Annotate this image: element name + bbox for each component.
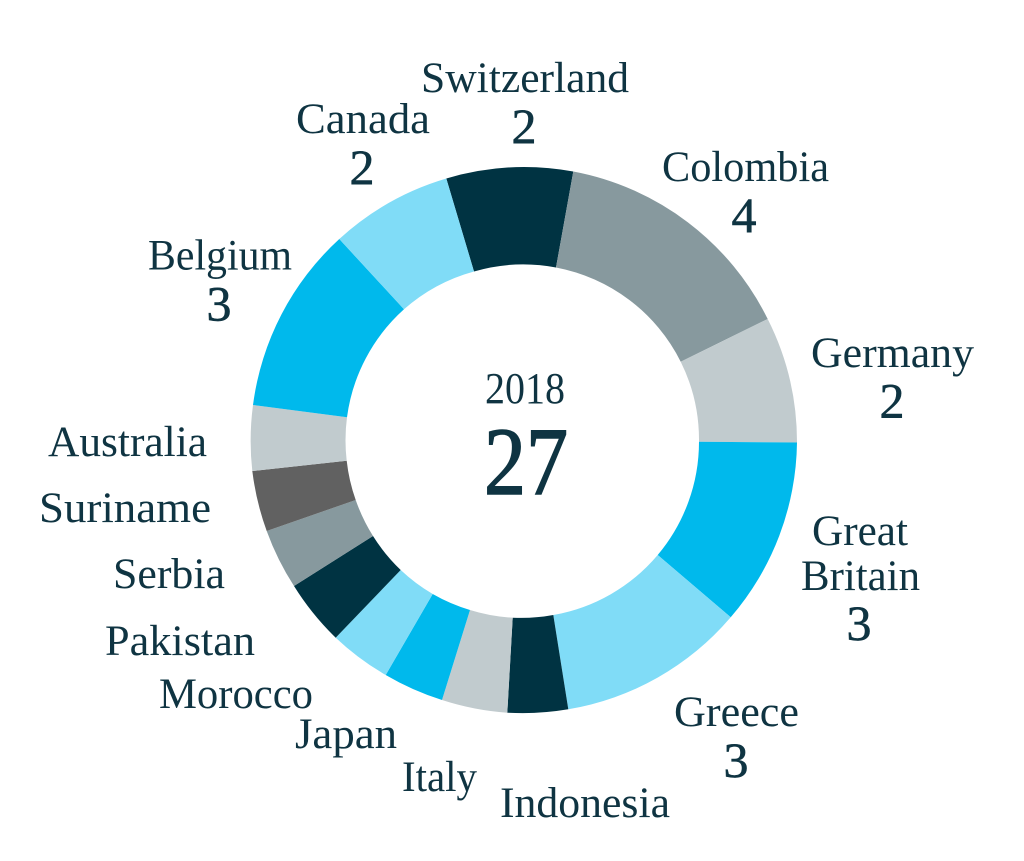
- label: Great Britain 3: Great: [812, 508, 908, 555]
- segment: Morocco: [336, 570, 433, 675]
- label: Belgium 3: Belgium: [148, 232, 292, 280]
- label: Japan: Japan: [295, 711, 397, 758]
- label: Suriname: Suriname: [39, 485, 211, 532]
- label: Canada 2: Canada: [296, 96, 430, 143]
- segment: Colombia: [556, 172, 768, 362]
- label: Colombia 4: [662, 144, 829, 243]
- label: Serbia: Serbia: [113, 551, 225, 598]
- label: Canada 2: [296, 96, 430, 195]
- label: Greece 3: Greece: [674, 689, 799, 736]
- label: Switzerland 2: [421, 55, 629, 154]
- label: Greece 3: [674, 689, 799, 788]
- segment: Serbia: [267, 500, 373, 586]
- center total: [484, 364, 568, 515]
- segment: Germany: [681, 319, 797, 442]
- segment: Belgium: [253, 239, 404, 417]
- segment: Canada: [339, 178, 474, 309]
- label: Belgium 3: [148, 232, 292, 332]
- segment: Italy: [442, 610, 513, 713]
- label: Indonesia: Indonesia: [500, 780, 670, 827]
- label: Great Britain 3: [801, 508, 920, 651]
- segment: Greece: [553, 555, 731, 709]
- label: Greece 3: 3: [724, 732, 748, 788]
- label: Germany 2: [811, 330, 974, 428]
- label: Belgium 3: 3: [206, 276, 232, 332]
- donut ring: [251, 167, 797, 713]
- segment: Japan: [386, 594, 470, 700]
- label: Switzerland 2: 2: [512, 98, 536, 154]
- center number: 27: [484, 408, 568, 515]
- label: Switzerland 2: Switzerland: [421, 55, 629, 102]
- label: Morocco: Morocco: [159, 671, 313, 718]
- segment: Indonesia: [507, 615, 568, 713]
- segment: Switzerland: [446, 167, 573, 272]
- label: Germany 2: Germany: [811, 330, 974, 377]
- center year: 2018: [485, 364, 565, 413]
- label: Italy: Italy: [402, 754, 477, 801]
- label: Great Britain 3: 3: [846, 595, 872, 651]
- segment: Great Britain: [658, 442, 797, 617]
- label: Germany 2: 2: [880, 372, 904, 428]
- label: Colombia 4: Colombia: [662, 144, 829, 191]
- label: Pakistan: Pakistan: [105, 618, 255, 665]
- segment: Pakistan: [294, 536, 401, 638]
- label: Great Britain 3: Britain: [801, 553, 920, 600]
- label: Colombia 4: 4: [732, 187, 756, 243]
- segment: Australia: [251, 405, 347, 471]
- label: Australia: Australia: [48, 419, 207, 466]
- label: Canada 2: 2: [350, 139, 374, 195]
- segment: Suriname: [252, 461, 356, 531]
